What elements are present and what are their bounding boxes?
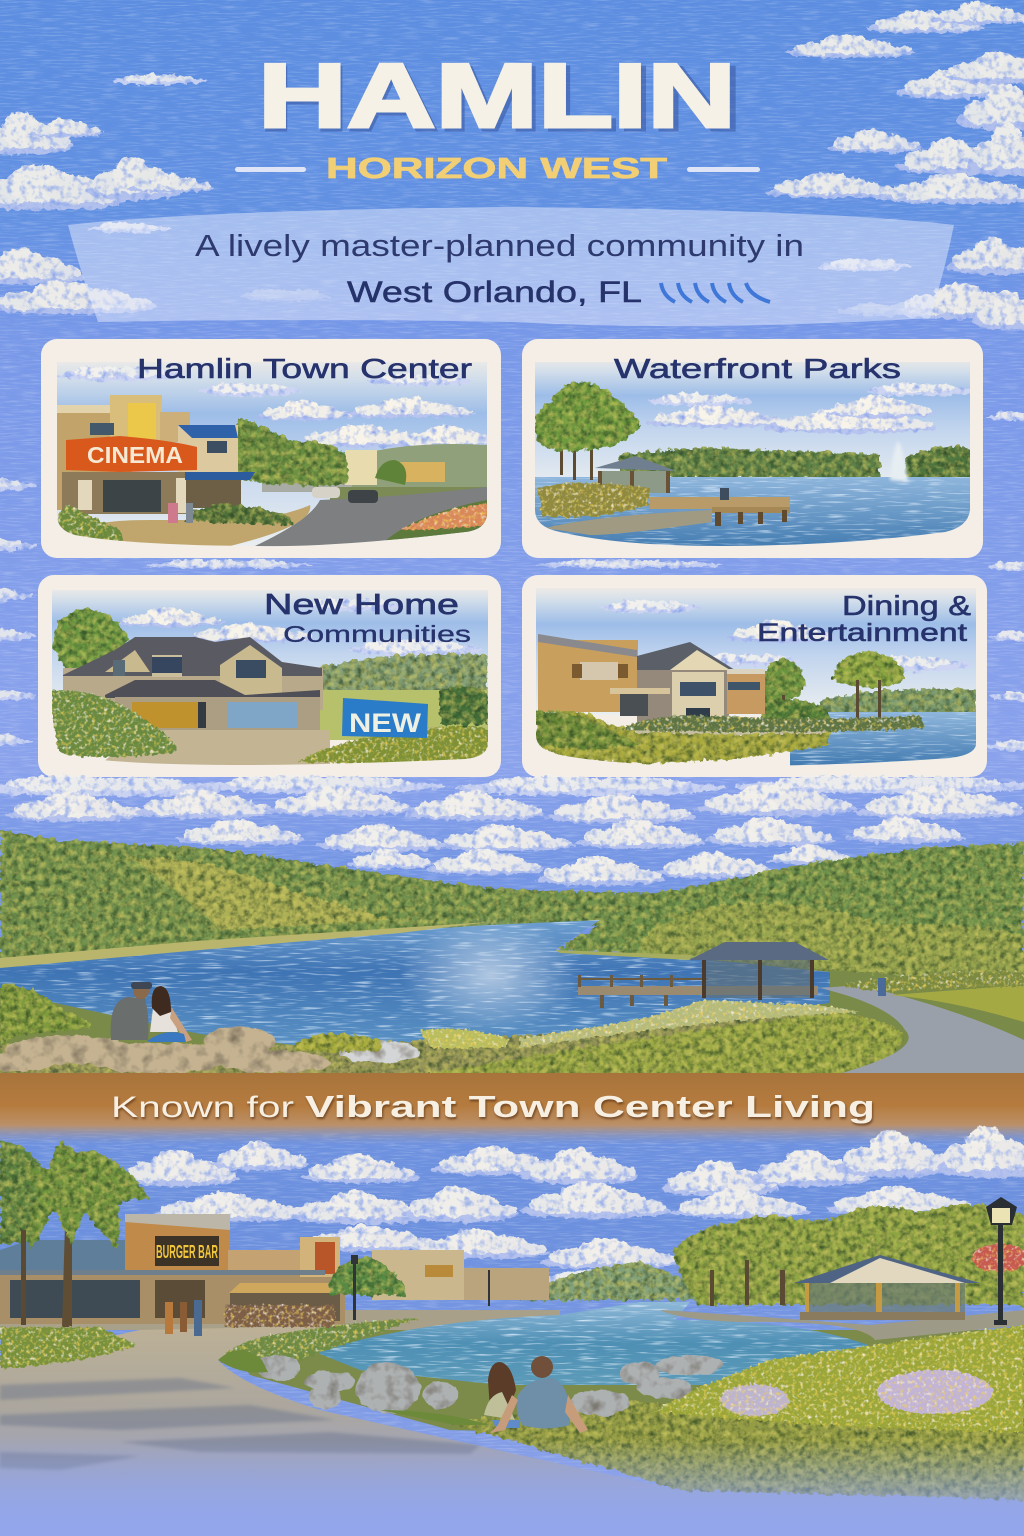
panel: Hamlin Town Center <box>41 339 504 558</box>
shoppers <box>165 1300 202 1336</box>
rocks: pond <box>256 1355 724 1416</box>
hanging flowers <box>972 1244 1024 1272</box>
scene: cinema street: CINEMA <box>87 442 183 468</box>
subtitle: Horizon West: HORIZON WEST <box>326 153 667 185</box>
banner text: Vibrant Town Center Living <box>305 1089 875 1124</box>
clouds: lake sky band <box>0 775 1024 886</box>
ground base <box>218 1330 1024 1445</box>
walkway far <box>0 1310 560 1330</box>
clouds: top sky <box>0 2 1024 330</box>
pathway <box>0 1325 1024 1536</box>
heading: Waterfront Parks <box>614 353 901 384</box>
grass <box>450 1400 1024 1500</box>
hills: sunlit slope <box>130 858 395 930</box>
title: HAMLIN <box>258 46 736 147</box>
panel: Waterfront Parks <box>522 339 983 558</box>
palm <box>0 1140 150 1327</box>
street lamps <box>351 1255 490 1320</box>
title: HAMLIN <box>259 49 742 150</box>
scene: cinema street <box>57 355 504 550</box>
lake <box>0 920 830 1048</box>
banner <box>0 1073 1024 1145</box>
heading <box>264 589 471 647</box>
tagline ribbon <box>68 207 954 326</box>
right lawn <box>890 985 1024 1022</box>
heading <box>757 590 971 647</box>
pond <box>315 1302 868 1385</box>
banner text <box>111 1089 875 1124</box>
far hills <box>520 1262 720 1300</box>
tagline ribbon: West Orlando, FL <box>347 276 642 309</box>
lawn and ground <box>0 1013 905 1075</box>
building: burger bar <box>0 1214 346 1324</box>
heading: Hamlin Town Center <box>137 353 472 384</box>
heading: Communities <box>283 621 471 647</box>
scene: new homes: NEW <box>349 708 422 738</box>
pond walkway <box>660 1310 1024 1340</box>
buildings: distant shops <box>372 1250 549 1300</box>
heading: Dining & <box>842 590 971 621</box>
subtitle: Horizon West <box>235 153 760 185</box>
flower bed: left <box>0 1327 137 1368</box>
couple on grass <box>484 1356 588 1433</box>
clouds: page margins <box>0 412 1024 751</box>
building: burger bar: BURGER BAR <box>156 1242 218 1262</box>
banner text: Known for <box>111 1091 294 1124</box>
diners <box>225 1305 335 1327</box>
path shadows <box>0 1378 480 1470</box>
panel: Dining & Entertainment <box>522 575 987 777</box>
lamp post <box>986 1197 1017 1325</box>
walking path <box>820 985 1024 1075</box>
heading: Entertainment <box>757 619 967 647</box>
pavilion <box>794 1255 980 1320</box>
distant walker <box>878 978 886 996</box>
hills: right <box>555 843 1024 990</box>
scene: town center pond <box>0 1140 1024 1536</box>
shrub line <box>218 1350 490 1425</box>
flower bed: right <box>655 1325 1024 1432</box>
flower bed <box>520 1000 860 1048</box>
far shore <box>0 922 490 968</box>
hills: left <box>0 830 653 962</box>
boat dock <box>578 975 818 1008</box>
tagline ribbon: A lively master-planned community in <box>195 228 804 263</box>
bottom fade <box>0 1440 1024 1536</box>
clouds: town sky <box>121 1126 1024 1288</box>
trees: right <box>673 1204 1024 1305</box>
heading: New Home <box>264 589 459 621</box>
panel: New Home Communities <box>38 575 501 777</box>
rocks <box>0 1027 420 1073</box>
ground base <box>0 955 1024 1075</box>
scene: lake overlook <box>0 830 1024 1075</box>
shrubs <box>0 985 90 1045</box>
flower bed: pond edge <box>220 1318 420 1372</box>
street trees <box>328 1258 406 1295</box>
scene: new homes <box>52 585 488 765</box>
scene: lakeside restaurant <box>536 585 980 768</box>
gazebo <box>689 942 829 1000</box>
couple on rock <box>111 982 192 1042</box>
scene: lake with fountain <box>535 355 972 552</box>
